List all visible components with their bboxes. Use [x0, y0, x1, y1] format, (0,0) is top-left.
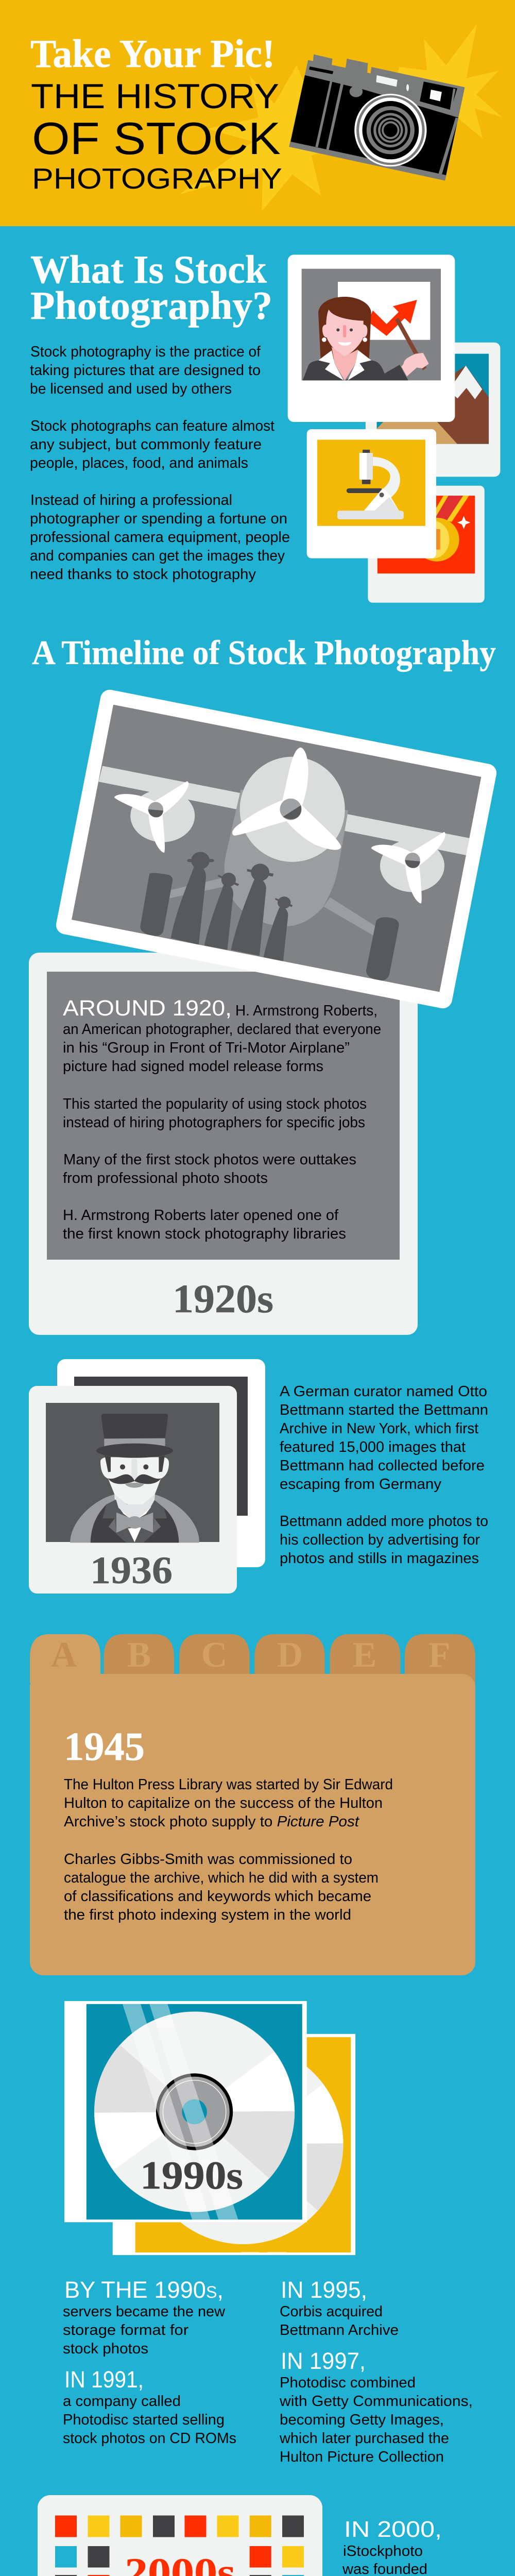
polaroid: businesswoman with chart	[288, 255, 455, 422]
text: Otto Bettmann: Bettmann had collected before	[280, 1458, 485, 1474]
text: Hulton Press Library: Hulton to capitalize on the success of the Hulton	[64, 1795, 383, 1811]
text: around 1920: H. Armstrong Roberts,	[235, 1003, 377, 1019]
text: 1990s right column: Bettmann Archive	[280, 2322, 399, 2338]
text: Otto Bettmann: escaping from Germany	[280, 1476, 441, 1493]
photo thumbnails grid	[55, 2515, 304, 2576]
tab letters: C	[201, 1635, 227, 1675]
text: 1990s left column: storage format for	[63, 2322, 188, 2338]
text: 1990s left column: servers became the new	[63, 2303, 226, 2320]
text: 2000 and 2003: iStockphoto	[343, 2543, 423, 2560]
illustration: man with top hat	[70, 1414, 199, 1543]
text: 1990s left column: BY THE 1990S,	[64, 2277, 224, 2303]
text: around 1920: This started the popularity of using stock photos	[63, 1096, 367, 1112]
text: 1990s right column: Photodisc combined	[280, 2375, 416, 2391]
propeller: right	[371, 832, 445, 903]
heading: what is stock photography	[30, 247, 272, 328]
text: Otto Bettmann: A German curator named Otto	[280, 1383, 487, 1400]
silhouettes: posts and people	[140, 852, 399, 980]
intro text block	[30, 344, 290, 583]
text: around 1920: instead of hiring photographers for specific jobs	[63, 1114, 365, 1131]
folder tabs	[30, 1634, 475, 1695]
text: 1990s right column: Corbis acquired	[280, 2303, 383, 2320]
text: around 1920: H. Armstrong Roberts later opened one of	[63, 1207, 339, 1224]
text: 1990s left column: stock photos on CD ROMs	[63, 2430, 236, 2447]
intro text block: taking pictures that are designed to	[30, 362, 261, 379]
propeller: centre	[232, 748, 341, 850]
text: 1990s right column: IN 1997,	[281, 2348, 366, 2374]
tab letters: D	[277, 1635, 303, 1675]
title: Take Your Pic!	[30, 31, 275, 76]
text: Otto Bettmann: photos and stills in magazines	[280, 1550, 479, 1567]
text: 1990s right column: becoming Getty Images,	[280, 2412, 444, 2428]
tab letters: B	[127, 1635, 151, 1675]
tab letters: E	[353, 1635, 376, 1675]
text: Otto Bettmann: Bettmann started the Bettmann	[280, 1402, 488, 1418]
intro text block: Stock photographs can feature almost	[30, 418, 274, 434]
text: Hulton Press Library	[64, 1776, 393, 1923]
title: PHOTOGRAPHY	[32, 162, 282, 195]
intro text block: people, places, food, and animals	[30, 455, 248, 471]
propeller: left	[114, 781, 188, 853]
intro text block: photographer or spending a fortune on	[30, 511, 287, 527]
text: 1990s right column: with Getty Communications,	[279, 2393, 473, 2410]
polaroid: 1936 back	[57, 1359, 265, 1567]
text: Hulton Press Library: Archive’s stock photo supply to Picture Post	[64, 1814, 360, 1830]
CD case: back yellow	[113, 2034, 355, 2262]
text: Otto Bettmann: featured 15,000 images that	[280, 1439, 466, 1455]
polaroid: medal	[368, 486, 485, 603]
text: 1990s left column: IN 1991,	[64, 2366, 144, 2393]
title: THE HISTORY	[31, 77, 279, 116]
label: 1945: 1945	[64, 1724, 145, 1769]
intro text block: be licensed and used by others	[30, 381, 232, 397]
polaroid: mountain	[366, 343, 500, 477]
text: 1990s left column	[63, 2277, 236, 2447]
text: 1990s right column: IN 1995,	[281, 2277, 367, 2303]
text: Otto Bettmann: Bettmann added more photos to	[280, 1513, 488, 1530]
text: around 1920: from professional photo shoots	[63, 1170, 268, 1187]
tab letters: F	[428, 1635, 450, 1675]
panel: file folder 1945	[30, 1634, 475, 1975]
photo: tri-motor airplane group	[55, 688, 498, 1010]
text: 1990s right column: which later purchased the	[279, 2430, 449, 2447]
icon: camera	[289, 54, 465, 181]
text: 1990s left column: stock photos	[63, 2341, 148, 2357]
tab letters	[51, 1635, 450, 1675]
text: around 1920: picture had signed model release forms	[63, 1058, 323, 1075]
text: around 1920: an American photographer, declared that everyone	[63, 1021, 381, 1038]
header band	[0, 0, 515, 226]
text: around 1920	[63, 996, 381, 1242]
polaroid: 1936 front	[29, 1386, 237, 1594]
text: 2000 and 2003: IN 2000,	[344, 2517, 442, 2542]
text: 1990s left column: Photodisc started selling	[63, 2412, 225, 2428]
text: Hulton Press Library: the first photo indexing system in the world	[64, 1907, 351, 1923]
label: 1936: 1936	[90, 1549, 173, 1592]
text: 1990s right column: Hulton Picture Collection	[280, 2449, 444, 2465]
icon: rising chart arrow	[370, 300, 417, 336]
title: OF STOCK	[32, 113, 281, 164]
label: 1920s: 1920s	[173, 1276, 273, 1321]
text: Otto Bettmann	[280, 1383, 488, 1567]
heading: what is stock photography: What Is Stock	[30, 247, 267, 292]
label: 1990s: 1990s	[140, 2153, 243, 2197]
text: around 1920: in his “Group in Front of Tri-Motor Airplane”	[63, 1040, 350, 1056]
polaroid: 1920s panel	[29, 953, 418, 1335]
intro text block: Instead of hiring a professional	[30, 492, 232, 509]
polaroid: microscope	[307, 429, 436, 558]
icon: desktop monitor 2000s	[38, 2495, 322, 2576]
intro text block: any subject, but commonly feature	[30, 436, 262, 453]
text: 1990s right column	[279, 2277, 473, 2465]
intro text block: need thanks to stock photography	[30, 566, 256, 583]
heading: timeline: A Timeline of Stock Photography	[32, 634, 496, 672]
text: 1990s left column: a company called	[63, 2393, 181, 2410]
text: Hulton Press Library: The Hulton Press Library was started by Sir Edward	[64, 1776, 393, 1793]
intro text block: Stock photography is the practice of	[30, 344, 261, 360]
tab letters: A	[51, 1635, 77, 1675]
icon: pointer stick	[395, 318, 426, 370]
title	[30, 31, 282, 195]
text: around 1920: the first known stock photography libraries	[63, 1226, 346, 1242]
text: around 1920: AROUND 1920,	[63, 996, 232, 1021]
text: Otto Bettmann: Archive in New York, which first	[280, 1420, 478, 1437]
text: Hulton Press Library: of classifications and keywords which became	[64, 1888, 371, 1905]
text: Hulton Press Library: catalogue the archive, which he did with a system	[64, 1870, 379, 1886]
CD case: front teal with disc	[64, 2001, 307, 2222]
flash starburst behind camera	[179, 24, 503, 211]
text: Hulton Press Library: Charles Gibbs-Smith was commissioned to	[64, 1851, 352, 1868]
intro text block: and companies can get the images they	[30, 548, 285, 564]
text: around 1920: Many of the first stock photos were outtakes	[63, 1151, 356, 1168]
heading: what is stock photography: Photography?	[30, 283, 272, 328]
intro text block: professional camera equipment, people	[30, 529, 290, 546]
text: 2000 and 2003	[342, 2517, 442, 2576]
text: Otto Bettmann: his collection by advertising for	[280, 1532, 480, 1548]
